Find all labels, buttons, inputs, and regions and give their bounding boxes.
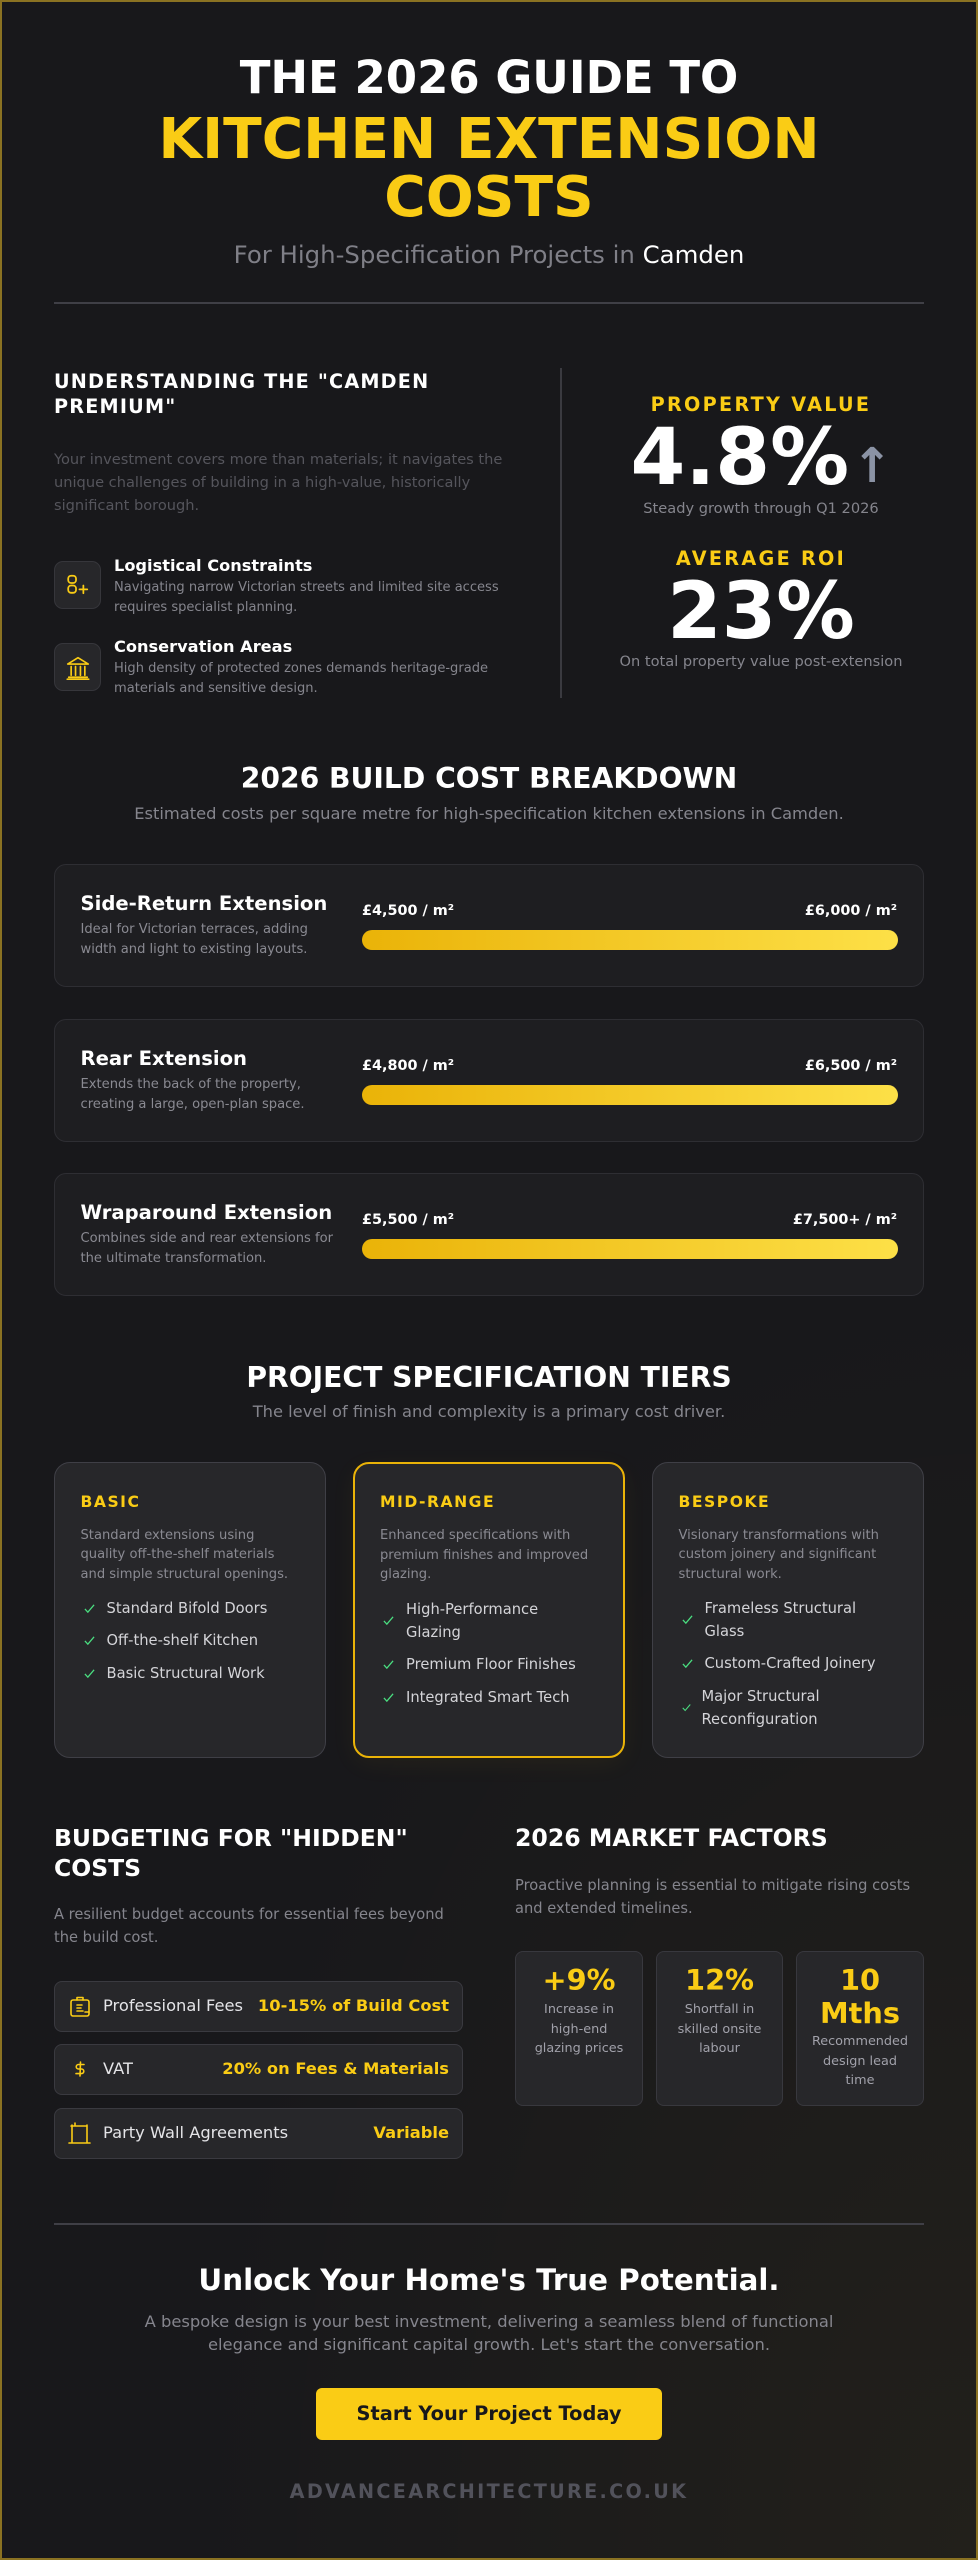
list item: Standard Bifold Doors: [106, 1600, 267, 1617]
panel: wraparound: £7,500+ / m²: [793, 1212, 897, 1228]
panel: side-return: £6,000 / m²: [805, 903, 897, 919]
panel: bespoke tier: Visionary transformations with: [678, 1528, 879, 1542]
panel: bespoke tier: custom joinery and significant: [678, 1547, 876, 1562]
intro text: and extended timelines.: [515, 1900, 693, 1916]
panel: rear: £4,800 / m²: [362, 1058, 454, 1074]
stat: labour: skilled onsite: [678, 2022, 761, 2037]
intro text: the build cost.: [54, 1928, 158, 1946]
heading: build cost: 2026 BUILD COST BREAKDOWN: [241, 762, 737, 795]
list item: Glass: [704, 1623, 744, 1640]
cta: [144, 2263, 833, 2503]
panel: mid-range tier: [353, 1462, 625, 1758]
button: [316, 2388, 662, 2440]
stat: property value: Steady growth through Q1 2026: [643, 500, 879, 517]
panel: hidden costs: [54, 1824, 444, 1946]
title highlight: KITCHEN EXTENSION: [158, 107, 820, 172]
icon: clipboard: [70, 1996, 90, 2017]
heading: COSTS: [54, 1854, 141, 1882]
item: logistical constraints: requires specialist planning.: [114, 600, 297, 615]
heading: PREMIUM": [54, 395, 176, 418]
panel: camden premium: [54, 370, 502, 696]
panel: mid-range tier: Enhanced specifications with: [380, 1528, 570, 1543]
icon: up arrow: ↑: [852, 438, 892, 494]
list item: Custom-Crafted Joinery: [704, 1655, 876, 1672]
list item: [384, 1601, 538, 1641]
cta text: A bespoke design is your best investment, delivering a seamless blend of functional: [145, 2312, 833, 2331]
panel: wraparound: the ultimate transformation.: [80, 1250, 266, 1266]
heading: build cost: [134, 762, 844, 823]
list item: Major Structural: [702, 1688, 820, 1705]
header divider: [54, 302, 924, 304]
bar: [362, 930, 898, 950]
panel: bespoke tier: [652, 1462, 924, 1758]
list item: [682, 1688, 820, 1728]
panel: bespoke tier: BESPOKE: [678, 1492, 770, 1510]
item: conservation areas: High density of protected zones demands heritage-grade: [114, 661, 488, 676]
intro text: [54, 451, 502, 514]
heading: [54, 370, 429, 418]
panel: mid-range tier: glazing.: [380, 1567, 431, 1582]
item: logistical constraints: Logistical Constraints: [114, 556, 312, 575]
icon: logistics: [54, 561, 101, 609]
panel: side-return: [54, 864, 924, 987]
list item: Glazing: [406, 1624, 461, 1641]
row: party wall: [54, 2108, 463, 2159]
footer url: ADVANCEARCHITECTURE.CO.UK: [290, 2480, 688, 2503]
list item: High-Performance: [406, 1601, 538, 1618]
list item: Reconfiguration: [702, 1711, 818, 1728]
stat: property value: [630, 393, 892, 517]
panel: wraparound: Wraparound Extension: [80, 1201, 332, 1224]
stat: property value: PROPERTY VALUE: [651, 393, 871, 416]
stat: lead time: 10: [840, 1963, 880, 1997]
stat: labour: labour: [699, 2041, 740, 2056]
stat: average roi: [620, 547, 902, 670]
list item: [682, 1600, 856, 1640]
stat: glazing: [515, 1951, 643, 2106]
stat: lead time: [796, 1951, 924, 2106]
title highlight: COSTS: [384, 165, 594, 230]
panel: market factors: [515, 1824, 910, 1916]
panel: mid-range tier: MID-RANGE: [380, 1493, 495, 1511]
divider: [54, 2223, 924, 2225]
heading: UNDERSTANDING THE "CAMDEN: [54, 370, 429, 392]
heading: tiers: PROJECT SPECIFICATION TIERS: [246, 1360, 732, 1394]
panel: wraparound: Combines side and rear extensions for: [80, 1231, 333, 1246]
panel: basic tier: BASIC: [80, 1492, 140, 1510]
heading: BUDGETING FOR "HIDDEN": [54, 1824, 408, 1852]
stat: lead time: Mths: [820, 1996, 900, 2030]
row: vat: [54, 2044, 463, 2095]
panel: rear: £6,500 / m²: [805, 1058, 897, 1074]
list item: Integrated Smart Tech: [406, 1689, 570, 1706]
heading: [54, 1824, 408, 1882]
list item: Basic Structural Work: [106, 1665, 265, 1682]
icon: conservation: [54, 643, 101, 691]
stat: average roi: On total property value post-extension: [620, 653, 902, 670]
bar: [362, 1085, 898, 1105]
cta heading: Unlock Your Home's True Potential.: [198, 2263, 780, 2297]
panel: side-return: width and light to existing layouts.: [80, 942, 307, 956]
icon: dollar: [75, 2061, 85, 2077]
bar: [362, 1239, 898, 1259]
panel: side-return: Side-Return Extension: [80, 892, 327, 915]
heading: 2026 MARKET FACTORS: [515, 1824, 828, 1852]
item: logistical constraints: Navigating narrow Victorian streets and limited site access: [114, 580, 499, 595]
panel: side-return: Ideal for Victorian terraces, adding: [80, 922, 308, 937]
cta text: elegance and significant capital growth. Let's start the conversation.: [208, 2335, 770, 2354]
panel: mid-range tier: premium finishes and improved: [380, 1548, 588, 1563]
panel: basic tier: Standard extensions using: [80, 1528, 254, 1542]
panel: basic tier: quality off-the-shelf materials: [80, 1547, 274, 1562]
stat: property value: 4.8%: [630, 411, 849, 503]
stat: lead time: design lead: [823, 2054, 897, 2069]
title highlight: [158, 107, 820, 230]
icon: wall frame: [68, 2122, 91, 2144]
cta text: [144, 2312, 833, 2354]
panel: rear: creating a large, open-plan space.: [80, 1096, 305, 1112]
item: conservation areas: materials and sensitive design.: [114, 681, 318, 696]
panel: wraparound: [54, 1173, 924, 1296]
panel: bespoke tier: structural work.: [678, 1567, 782, 1582]
panel: rear: Rear Extension: [80, 1047, 247, 1070]
list item: Premium Floor Finishes: [406, 1656, 576, 1673]
row: vat: 20% on Fees & Materials: [222, 2059, 449, 2078]
intro text: A resilient budget accounts for essential fees beyond: [54, 1906, 444, 1922]
row: vat: VAT: [103, 2059, 133, 2078]
stat: labour: Shortfall in: [685, 2002, 754, 2017]
stat: glazing: +9%: [542, 1963, 616, 1997]
stat: glazing: Increase in: [544, 2002, 614, 2017]
row: party wall: Variable: [373, 2123, 449, 2142]
stat: lead time: Recommended: [812, 2034, 908, 2049]
intro text: Your investment covers more than materials; it navigates the: [54, 451, 502, 468]
intro text: Proactive planning is essential to mitigate rising costs: [515, 1876, 910, 1894]
stat: average roi: 23%: [667, 566, 855, 657]
intro text: [515, 1876, 910, 1916]
intro text: significant borough.: [54, 497, 199, 514]
item: conservation areas: [114, 637, 488, 696]
item: logistical constraints: [114, 556, 499, 615]
stat: average roi: AVERAGE ROI: [676, 547, 846, 570]
heading: tiers: The level of finish and complexity is a primary cost driver.: [253, 1402, 725, 1421]
panel: rear: [54, 1019, 924, 1142]
vertical divider: [560, 368, 562, 698]
stat: glazing: high-end: [551, 2022, 607, 2037]
panel: wraparound: £5,500 / m²: [362, 1212, 454, 1228]
panel: rear: Extends the back of the property,: [80, 1077, 301, 1092]
stat: labour: [656, 1951, 783, 2106]
intro text: [54, 1906, 444, 1946]
panel: basic tier: and simple structural openings.: [80, 1567, 288, 1582]
row: professional fees: [54, 1981, 463, 2032]
subtitle: For High-Specification Projects in Camden: [234, 240, 744, 269]
header: [158, 51, 820, 269]
row: party wall: Party Wall Agreements: [103, 2123, 288, 2142]
panel: basic tier: [54, 1462, 326, 1758]
list item: Off-the-shelf Kitchen: [106, 1632, 258, 1649]
item: conservation areas: Conservation Areas: [114, 637, 292, 656]
title line: THE 2026 GUIDE TO: [240, 51, 738, 104]
heading: tiers: [246, 1360, 732, 1421]
row: professional fees: 10-15% of Build Cost: [258, 1996, 449, 2015]
list item: Frameless Structural: [704, 1600, 856, 1617]
stat: labour: 12%: [685, 1963, 754, 1997]
intro text: unique challenges of building in a high-value, historically: [54, 474, 470, 491]
button: Start Your Project Today: [356, 2402, 622, 2425]
stat: glazing: glazing prices: [535, 2041, 623, 2056]
panel: side-return: £4,500 / m²: [362, 903, 454, 919]
row: professional fees: Professional Fees: [103, 1996, 243, 2015]
heading: build cost: Estimated costs per square metre for high-specification kitchen extensions in Camden.: [134, 804, 844, 823]
panel: stats: [620, 393, 902, 670]
stat: lead time: time: [846, 2073, 874, 2088]
